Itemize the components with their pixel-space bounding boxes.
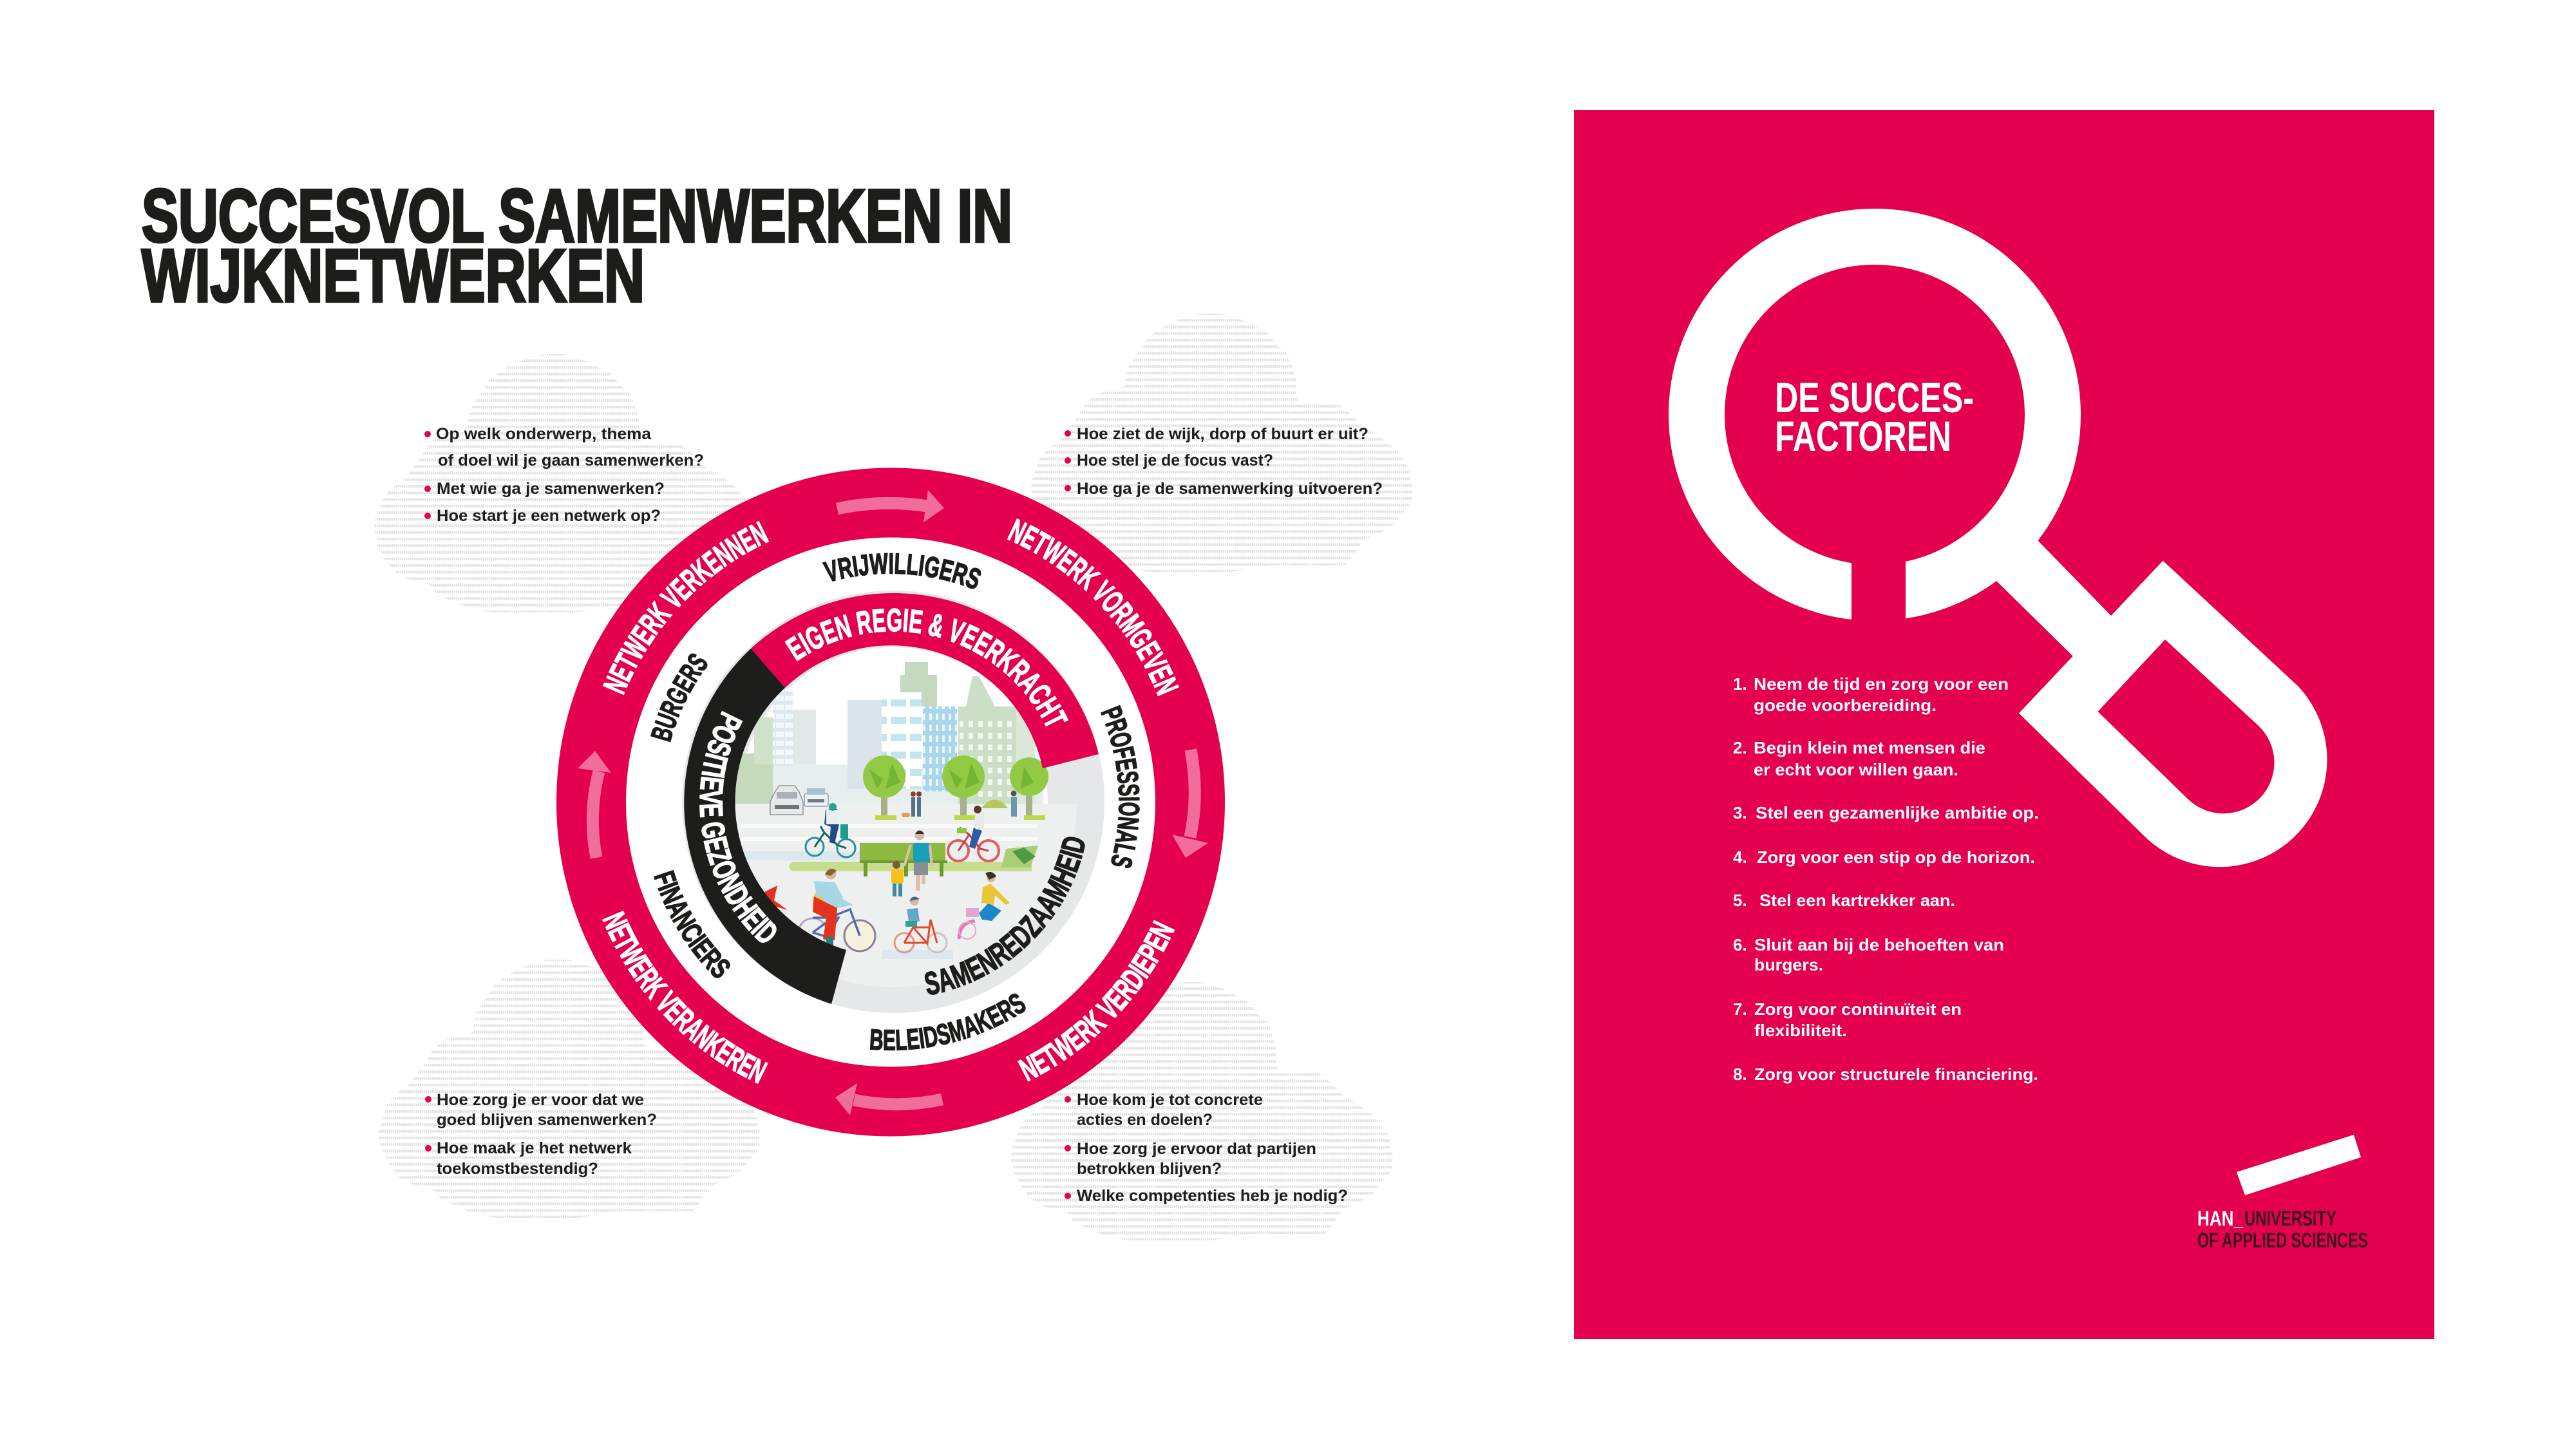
list of success factors: 3. <box>1733 803 1747 822</box>
questions: netwerk verdiepen: Welke competenties heb je nodig? <box>1077 1187 1348 1205</box>
questions: netwerk verdiepen: Hoe kom je tot concrete <box>1077 1091 1263 1109</box>
list of success factors: Zorg voor structurele financiering. <box>1754 1065 2038 1084</box>
list of success factors: er echt voor willen gaan. <box>1754 760 1958 779</box>
list of success factors: Stel een kartrekker aan. <box>1759 891 1955 910</box>
list of success factors: 4. <box>1733 848 1747 867</box>
label: beleidsmakers: BELEIDSMAKERS <box>869 993 1026 1051</box>
teal bicycle <box>806 803 855 857</box>
questions: netwerk vormgeven: Hoe stel je de focus vast? <box>1077 451 1273 469</box>
questions: netwerk verankeren: Hoe maak je het netwerk <box>437 1139 632 1157</box>
child bicycle <box>895 896 947 952</box>
label: vrijwilligers: VRIJWILLIGERS <box>822 553 981 589</box>
list of success factors <box>1733 674 2039 1084</box>
pedestrians and bush <box>902 791 1017 817</box>
list of success factors: Stel een gezamenlijke ambitie op. <box>1756 803 2039 822</box>
questions: netwerk verkennen: Hoe start je een netwerk op? <box>437 507 661 525</box>
questions: netwerk verankeren: Hoe zorg je er voor dat we <box>437 1091 644 1109</box>
bench <box>860 843 947 876</box>
title: SUCCESVOL SAMENWERKEN IN <box>142 174 1012 258</box>
logo: HAN University of Applied Sciences: UNIVERSITY <box>2244 1207 2336 1230</box>
logo: HAN University of Applied Sciences: HAN_ <box>2197 1207 2244 1230</box>
questions: netwerk verankeren: toekomstbestendig? <box>437 1160 598 1178</box>
white centre disc <box>623 535 1158 1069</box>
list of success factors: Zorg voor continuïteit en <box>1754 999 1962 1019</box>
outer ring: network phases <box>591 502 1190 1101</box>
circular diagram <box>556 468 1225 1136</box>
cloud: netwerk verkennen <box>374 354 756 612</box>
segment: positieve gezondheid <box>684 649 846 1004</box>
questions: netwerk verdiepen: betrokken blijven? <box>1077 1160 1222 1178</box>
city illustration <box>710 647 1077 987</box>
red bicycle <box>948 806 999 861</box>
logo: HAN University of Applied Sciences: OF APPLIED SCIENCES <box>2197 1229 2368 1252</box>
arrow: bottom <box>835 1083 942 1115</box>
cars <box>770 786 828 815</box>
list of success factors: goede voorbereiding. <box>1754 696 1937 715</box>
label: samenredzaamheid: SAMENREDZAAMHEID <box>925 837 1085 995</box>
panel heading: DE SUCCES- <box>1775 374 1974 421</box>
list of success factors: Zorg voor een stip op de horizon. <box>1757 848 2035 867</box>
title: WIJKNETWERKEN <box>142 234 645 317</box>
large bicycle with rider <box>799 868 875 955</box>
questions: netwerk verkennen: of doel wil je gaan samenwerken? <box>438 451 704 469</box>
label: netwerk vormgeven: NETWERK VORMGEVEN <box>1007 518 1180 697</box>
list of success factors: 1. <box>1733 674 1747 694</box>
list of success factors: 6. <box>1733 935 1747 954</box>
label: netwerk verkennen: NETWERK VERKENNEN <box>603 520 769 696</box>
label: positieve gezondheid: POSITIEVE GEZONDHEID <box>699 711 777 943</box>
questions: netwerk verkennen <box>424 425 704 525</box>
questions: netwerk vormgeven <box>1065 425 1383 498</box>
label: netwerk verankeren: NETWERK VERANKEREN <box>602 911 768 1084</box>
list of success factors: Begin klein met mensen die <box>1754 738 1985 757</box>
ground <box>710 804 1077 987</box>
list of success factors: 8. <box>1733 1065 1747 1084</box>
label: burgers: BURGERS <box>650 653 708 742</box>
questions: netwerk vormgeven: Hoe ga je de samenwerking uitvoeren? <box>1077 480 1383 498</box>
pink bicycle with rider <box>959 872 1010 939</box>
trees <box>863 755 1048 820</box>
questions: netwerk vormgeven: Hoe ziet de wijk, dorp of buurt er uit? <box>1077 425 1368 443</box>
panel: de succesfactoren <box>1574 110 2434 1339</box>
label: financiers: FINANCIERS <box>653 869 730 978</box>
questions: netwerk verdiepen <box>1065 1091 1348 1205</box>
icon: magnifying glass <box>1696 237 2327 867</box>
panel heading <box>1775 374 1974 460</box>
list of success factors: flexibiliteit. <box>1754 1021 1847 1040</box>
list of success factors: 5. <box>1733 891 1747 910</box>
cloud: netwerk verdiepen <box>1010 982 1393 1240</box>
shrub <box>1001 846 1038 867</box>
questions: netwerk verdiepen: Hoe zorg je ervoor dat partijen <box>1077 1140 1316 1158</box>
title <box>142 174 1012 317</box>
questions: netwerk verankeren: goed blijven samenwerken? <box>437 1111 657 1129</box>
list of success factors: Sluit aan bij de behoeften van <box>1754 935 2004 954</box>
label: netwerk verdiepen: NETWERK VERDIEPEN <box>1018 920 1175 1082</box>
man and child <box>891 831 932 896</box>
logo: HAN University of Applied Sciences <box>2197 1135 2368 1252</box>
list of success factors: 2. <box>1733 738 1747 757</box>
questions: netwerk verdiepen: acties en doelen? <box>1077 1111 1213 1129</box>
questions: netwerk verankeren <box>425 1091 657 1178</box>
questions: netwerk verkennen: Op welk onderwerp, thema <box>436 425 652 443</box>
arrow: left <box>578 751 611 858</box>
grey ring: samenredzaamheid <box>682 591 1104 1013</box>
label: professionals: PROFESSIONALS <box>1100 705 1140 868</box>
label: eigen regie en veerkracht: EIGEN REGIE & VEERKRACHT <box>784 608 1069 726</box>
cloud: netwerk vormgeven <box>1030 314 1413 572</box>
panel heading: FACTOREN <box>1775 412 1951 460</box>
red child seat <box>764 886 788 910</box>
questions: netwerk verkennen: Met wie ga je samenwerken? <box>437 480 665 498</box>
list of success factors: burgers. <box>1754 955 1823 974</box>
arrow: top <box>837 490 944 522</box>
arrow: right <box>1172 750 1208 858</box>
cloud: netwerk verankeren <box>378 960 761 1218</box>
segment: eigen regie en veerkracht <box>751 593 1099 768</box>
list of success factors: Neem de tijd en zorg voor een <box>1754 674 2009 694</box>
list of success factors: 7. <box>1733 999 1747 1019</box>
